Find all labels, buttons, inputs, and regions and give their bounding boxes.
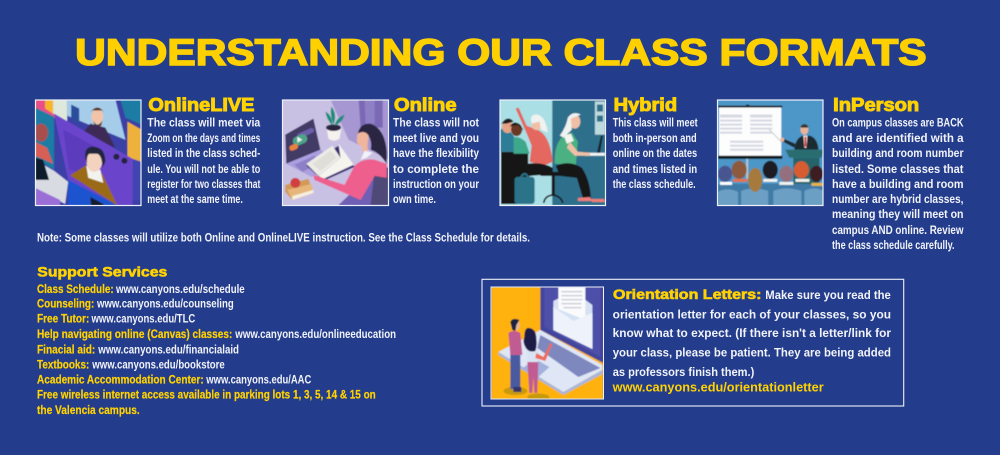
- support services list: Academic Accommodation Center:: [37, 374, 204, 387]
- description: and are identified with a: [832, 132, 964, 145]
- panel: InPerson: [717, 94, 964, 252]
- support services list: the Valencia campus.: [37, 404, 140, 417]
- description: building and room number: [832, 147, 964, 160]
- description: the class schedule.: [613, 178, 696, 191]
- heading: OnlineLIVE: [148, 94, 254, 115]
- image frame: [282, 100, 388, 206]
- panel: support services: [37, 264, 396, 417]
- description: to complete the: [393, 163, 480, 176]
- description: meaning they will meet on: [832, 208, 964, 221]
- note: Note: Some classes will utilize both Online and OnlineLIVE instruction. See the Class Schedule for details.: [37, 232, 530, 245]
- orientation text: [612, 287, 891, 395]
- description: ule. You will not be able to: [147, 163, 260, 176]
- image frame: [500, 100, 606, 206]
- support services list: www.canyons.edu/onlineeducation: [234, 328, 396, 341]
- support services list: www.canyons.edu/bookstore: [91, 359, 225, 372]
- description: own time.: [393, 193, 436, 206]
- orientation text: your class, please be patient. They are being added: [613, 346, 891, 360]
- support services list: Class Schedule:: [37, 283, 114, 296]
- support services heading: Support Services: [37, 264, 167, 280]
- image: person studying with laptop and book: [283, 100, 388, 205]
- orientation text: Make sure you read the: [765, 288, 891, 302]
- description: [832, 117, 964, 252]
- description: listed. Some classes that: [832, 163, 964, 176]
- support services list: www.canyons.edu/schedule: [115, 283, 245, 296]
- panel: OnlineLIVE: [34, 94, 261, 206]
- description: number are hybrid classes,: [832, 193, 964, 206]
- image: video call grid: [36, 100, 140, 205]
- orientation text: orientation letter for each of your classes, so you: [613, 307, 891, 321]
- description: Zoom on the days and times: [147, 132, 260, 145]
- description: online on the dates: [613, 147, 697, 160]
- description: This class will meet: [613, 117, 698, 130]
- description: and times listed in: [613, 163, 697, 176]
- heading: Hybrid: [614, 94, 677, 115]
- panel border: [482, 279, 904, 406]
- description: The class will meet via: [147, 117, 261, 130]
- image frame: [36, 100, 141, 206]
- panel: Online: [282, 94, 480, 206]
- description: register for two classes that: [147, 178, 260, 191]
- image frame: [718, 100, 823, 206]
- orientation text: as professors finish them.): [613, 365, 754, 379]
- description: meet live and you: [393, 132, 479, 145]
- support services list: www.canyons.edu/financialaid: [97, 344, 239, 357]
- description: On campus classes are BACK: [832, 117, 964, 130]
- support services list: Finacial aid:: [37, 344, 95, 357]
- description: [393, 117, 480, 206]
- panel: Hybrid: [500, 94, 698, 206]
- support services list: Counseling:: [37, 298, 94, 311]
- description: The class will not: [393, 117, 479, 130]
- description: [613, 117, 698, 191]
- description: have the flexibility: [393, 147, 479, 160]
- description: meet at the same time.: [147, 193, 243, 206]
- orientation text: Orientation Letters:: [613, 287, 762, 302]
- orientation text: www.canyons.edu/orientationletter: [612, 381, 824, 395]
- support services list: Help navigating online (Canvas) classes:: [37, 328, 232, 341]
- support services list: www.canyons.edu/counseling: [96, 298, 234, 311]
- support services list: www.canyons.edu/TLC: [91, 313, 196, 326]
- image: two people at a laptop with an envelope: [492, 288, 603, 398]
- description: have a building and room: [832, 178, 964, 191]
- panel: orientation letters: [482, 279, 904, 406]
- support services list: www.canyons.edu/AAC: [205, 374, 312, 387]
- description: instruction on your: [393, 178, 479, 191]
- image: students in person and online: [500, 100, 605, 205]
- description: listed in the class sched-: [147, 147, 260, 160]
- heading: InPerson: [833, 94, 919, 115]
- description: [147, 117, 261, 206]
- orientation text: know what to expect. (If there isn't a letter/link for: [613, 326, 891, 340]
- description: the class schedule carefully.: [832, 239, 954, 252]
- support services list: Textbooks:: [37, 359, 89, 372]
- title: UNDERSTANDING OUR CLASS FORMATS: [75, 32, 927, 73]
- image: lecture room with presenter: [718, 100, 822, 205]
- heading: Online: [394, 94, 456, 115]
- support services list: [37, 283, 396, 417]
- description: campus AND online. Review: [832, 224, 964, 237]
- support services list: Free wireless internet access available in parking lots 1, 3, 5, 14 & 15 on: [37, 389, 376, 402]
- description: both in-person and: [613, 132, 697, 145]
- image frame: [491, 287, 604, 399]
- support services list: Free Tutor:: [37, 313, 89, 326]
